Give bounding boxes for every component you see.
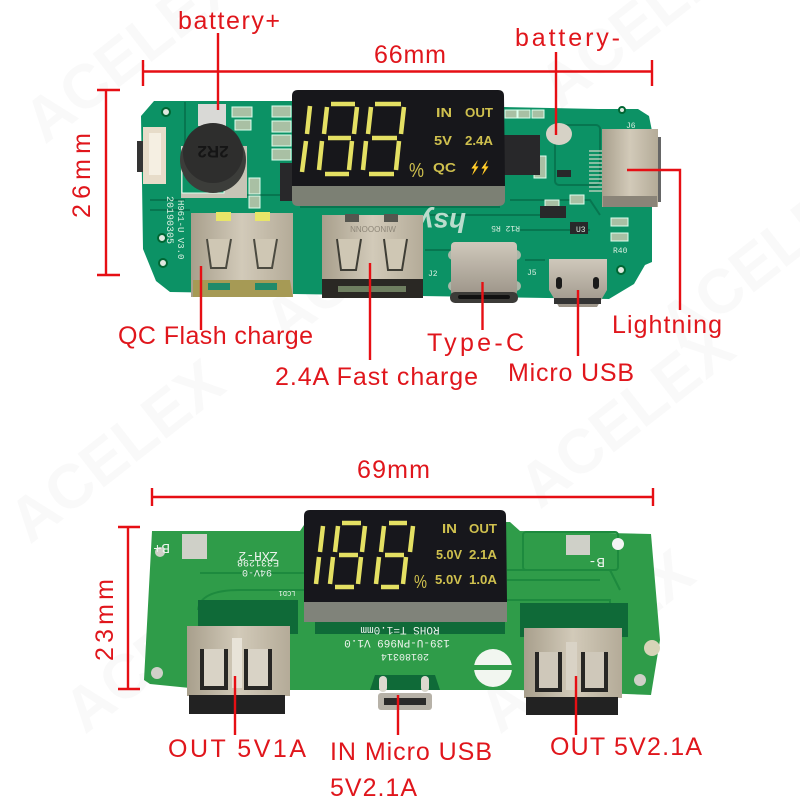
annotations: bottom board	[91, 456, 702, 800]
silkscreen labels: U3	[576, 226, 586, 235]
silkscreen labels: J5	[527, 269, 537, 278]
mounting holes	[158, 107, 625, 274]
panel: bottom circuit board	[144, 510, 660, 715]
leader lines	[235, 676, 576, 735]
label: Micro USB: Micro USB	[508, 359, 634, 387]
display labels: OUT	[469, 521, 497, 536]
label: battery plus: battery+	[178, 7, 280, 35]
seven segment digits	[302, 104, 404, 174]
display labels: IN	[436, 105, 452, 120]
silkscreen labels: 94V-0	[242, 566, 272, 577]
width dimension line 69mm	[152, 488, 653, 506]
port: input Micro USB	[378, 676, 432, 710]
silkscreen logo: hsy	[416, 207, 466, 238]
board traces	[198, 532, 620, 620]
label: 69mm: 69mm	[357, 456, 430, 484]
silkscreen labels	[163, 122, 636, 279]
port: 2.4A USB A	[322, 214, 423, 298]
battery pads	[151, 534, 660, 686]
small capacitors	[232, 106, 628, 241]
label: 66mm: 66mm	[374, 41, 446, 69]
power switch	[137, 127, 166, 184]
silkscreen labels: LCD1	[279, 588, 295, 596]
integrated circuits	[280, 135, 588, 234]
port: Type-C	[448, 242, 521, 303]
height dimension line 26mm	[97, 90, 120, 275]
component: LCD battery display	[292, 90, 505, 206]
port: 2.4A USB A: NNOOONIW	[350, 225, 396, 234]
annotations: top board	[68, 7, 722, 391]
port: Micro USB	[549, 259, 607, 307]
silkscreen labels: 139-U-PN969 V1.0	[344, 636, 450, 648]
display labels: %	[409, 160, 424, 182]
leader lines	[201, 33, 680, 360]
label: IN Micro USB: IN Micro USB	[330, 738, 492, 766]
display labels: 5V	[434, 133, 452, 148]
silkscreen labels: J6	[626, 122, 636, 131]
display labels: 2.4A	[465, 133, 494, 148]
label: Lightning: Lightning	[612, 311, 722, 339]
inductor	[180, 123, 247, 198]
component: LCD battery display	[304, 510, 507, 622]
display labels: 5.0V	[436, 547, 462, 562]
display labels: OUT	[465, 105, 493, 120]
panel: top circuit board	[137, 90, 661, 307]
display labels	[414, 521, 498, 592]
background watermark: ACELEX	[51, 537, 292, 746]
display labels: 2.1A	[469, 547, 498, 562]
display labels: 5.0V	[435, 572, 462, 587]
port: output 1A USB A	[187, 626, 290, 714]
label: 26mm: 26mm	[68, 133, 96, 218]
display labels: ⚡⚡	[470, 160, 490, 176]
silkscreen labels: J2	[428, 270, 438, 279]
silkscreen labels: R40	[613, 247, 628, 256]
display labels	[409, 105, 494, 182]
background watermark: ACELEX	[506, 312, 747, 521]
silkscreen labels: ROHS T=1.0mm	[360, 623, 440, 635]
label: OUT 5V1A: OUT 5V1A	[168, 735, 306, 763]
port: QC USB A	[191, 212, 293, 297]
display face	[304, 510, 507, 602]
dark port shadow areas	[198, 600, 628, 690]
silkscreen labels: B-	[588, 553, 605, 569]
board outline	[141, 101, 652, 299]
label: OUT 5V2.1A: OUT 5V2.1A	[550, 733, 702, 761]
height dimension line 23mm	[118, 527, 140, 689]
width dimension line 66mm	[143, 60, 652, 86]
silkscreen labels: E331298	[237, 556, 279, 567]
display side	[304, 602, 507, 622]
battery plus pad	[198, 104, 226, 126]
display side	[292, 186, 505, 206]
inductor: 2R2	[197, 142, 229, 161]
port: Lightning	[589, 129, 661, 207]
label: battery minus: battery-	[515, 24, 620, 52]
silkscreen labels: B+	[153, 539, 170, 555]
silkscreen labels: 20190305	[163, 196, 174, 244]
silkscreen labels	[153, 539, 605, 661]
background watermark: ACELEX	[251, 147, 492, 356]
display labels: %	[414, 572, 427, 592]
label: 23mm: 23mm	[91, 579, 119, 661]
seven segment digits	[316, 523, 413, 587]
manufacturer logo	[474, 649, 512, 687]
label: QC Flash charge: QC Flash charge	[118, 322, 313, 350]
label: Type-C: Type-C	[427, 329, 524, 357]
display labels: 1.0A	[469, 572, 498, 587]
silkscreen labels: 20180314	[381, 650, 429, 661]
silkscreen labels: R12 R5	[491, 223, 520, 232]
board outline	[144, 522, 660, 695]
silkscreen labels: H961-U V3.0	[175, 200, 185, 259]
label: 2.4A Fast charge: 2.4A Fast charge	[275, 363, 478, 391]
board traces	[150, 102, 600, 260]
display face	[292, 90, 505, 186]
battery minus pad	[546, 123, 572, 145]
background watermark: ACELEX	[466, 537, 707, 746]
silkscreen labels: ZXH-2	[238, 548, 278, 563]
display labels: QC	[433, 160, 457, 175]
background watermark: ACELEX	[0, 347, 237, 556]
display labels: IN	[442, 521, 457, 536]
port: output 2.1A USB A	[524, 628, 622, 715]
